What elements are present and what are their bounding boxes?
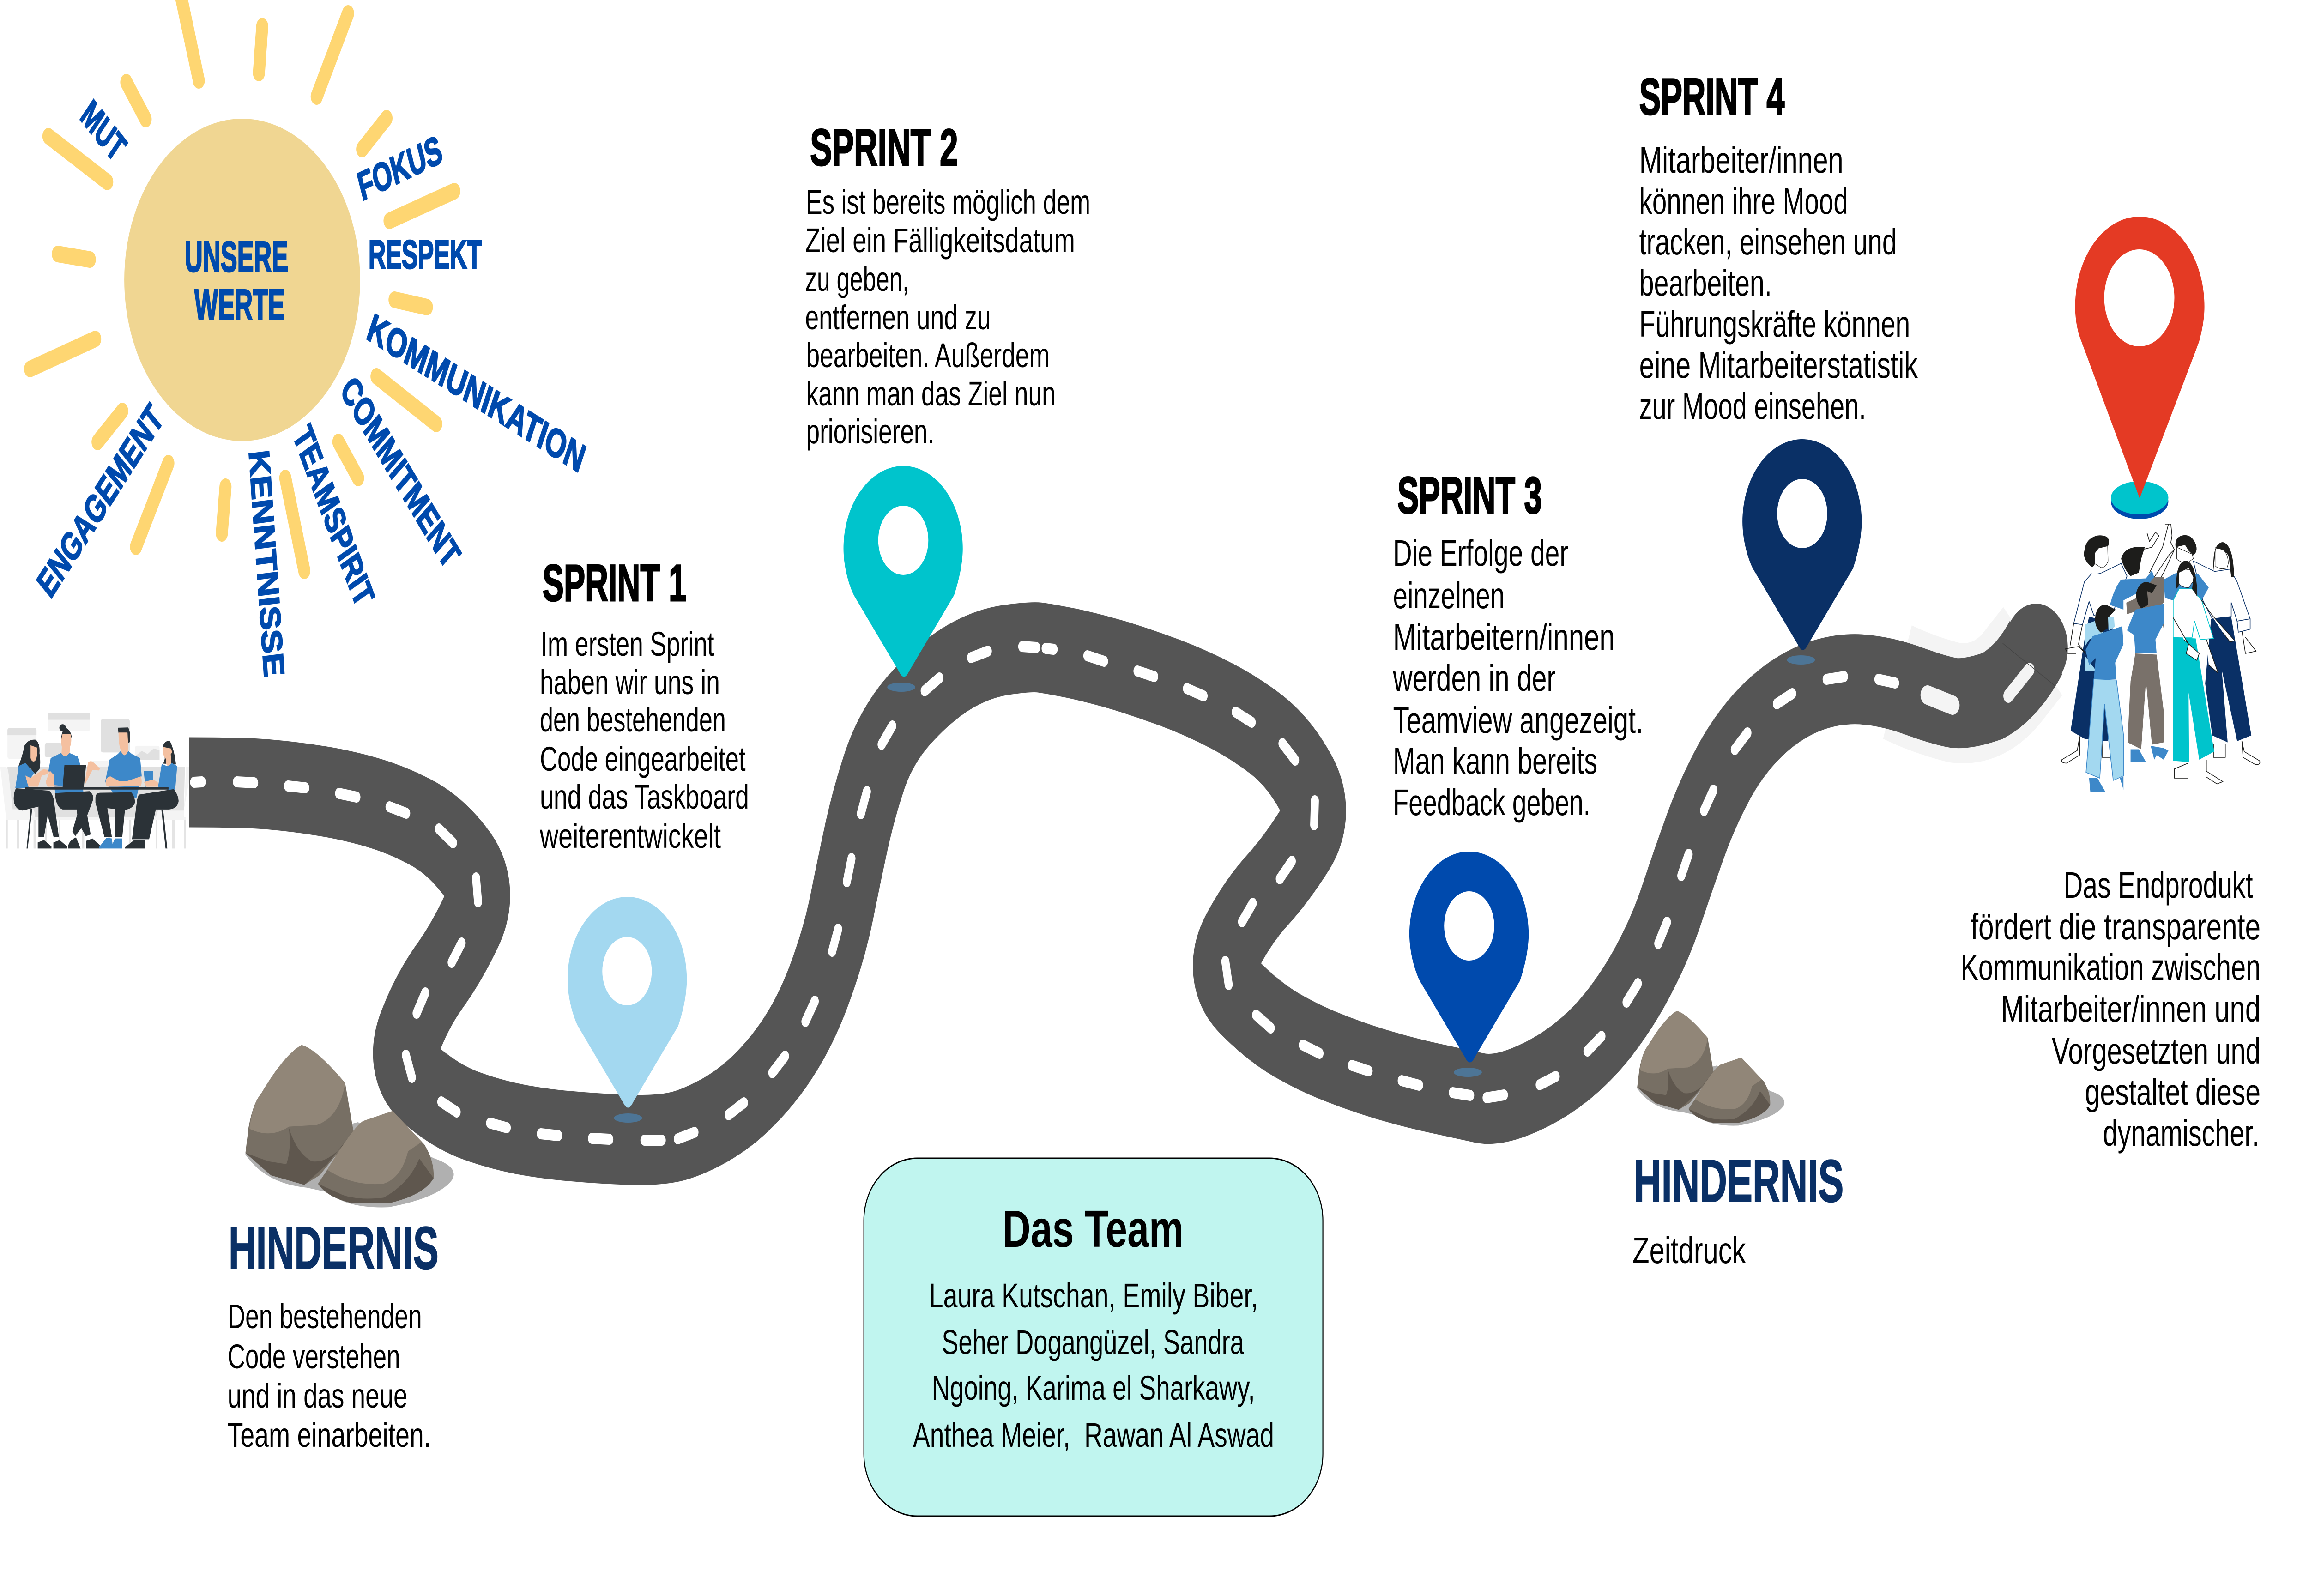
sprint 1 text: den bestehenden: [540, 701, 726, 739]
sprint 2 heading: SPRINT 2: [810, 119, 958, 176]
obstacle 2 heading: HINDERNIS: [1634, 1148, 1844, 1215]
end product text: Das Endprodukt: [2064, 864, 2253, 906]
back right person: [2194, 542, 2260, 765]
road end cap: [2004, 604, 2068, 691]
road end shoulder: [1898, 651, 2033, 703]
illustration: team at table: [0, 713, 192, 848]
lane dashes: [194, 647, 1895, 1140]
sprint 3 text: Die Erfolge der: [1393, 532, 1568, 574]
sprint 4 text: Führungskräfte können: [1639, 303, 1910, 345]
sun title: WERTE: [194, 281, 284, 329]
person 4: [125, 741, 179, 848]
sun disc: [124, 119, 360, 441]
obstacle 1 heading: HINDERNIS: [229, 1215, 439, 1282]
obstacle 1 text: [228, 1298, 431, 1454]
sprint 4 text: zur Mood einsehen.: [1639, 386, 1866, 427]
goal pin with disc: [2075, 217, 2205, 519]
person 2: [46, 724, 102, 848]
team names: Laura Kutschan, Emily Biber,: [929, 1277, 1258, 1315]
person 1: [14, 740, 67, 848]
sprint 4 text: Mitarbeiter/innen: [1639, 139, 1844, 181]
person 3: [96, 727, 142, 848]
rocks: second obstacle: [1637, 1011, 1784, 1126]
team names: Seher Dogangüzel, Sandra: [942, 1324, 1244, 1361]
sprint 4 text: bearbeiten.: [1639, 262, 1772, 303]
road: [189, 604, 2068, 1140]
sprint 3 text: [1393, 532, 1643, 823]
sprint 4 text: tracken, einsehen und: [1639, 221, 1897, 262]
end product text: [1961, 864, 2261, 1154]
sprint 3 text: werden in der: [1393, 658, 1556, 699]
team names: Anthea Meier, Rawan Al Aswad: [913, 1416, 1274, 1454]
end product text: fördert die transparente: [1971, 906, 2261, 947]
sprint 1 heading: SPRINT 1: [543, 554, 687, 612]
asphalt: [189, 647, 2036, 1140]
end product text: Kommunikation zwischen: [1961, 947, 2261, 988]
sprint 3 text: Man kann bereits: [1393, 740, 1597, 781]
value: Fokus: FOKUS: [354, 127, 446, 209]
sun rays: [30, 0, 454, 571]
sprint 2 text: [805, 183, 1090, 451]
obstacle 1 text: Den bestehenden: [228, 1298, 422, 1336]
sprint 4 text: [1639, 139, 1918, 427]
obstacle 1 text: Team einarbeiten.: [228, 1416, 431, 1454]
end product text: Mitarbeiter/innen und: [2001, 988, 2261, 1029]
sprint 1 text: Code eingearbeitet: [540, 740, 746, 778]
pin: sprint 3: [1409, 852, 1529, 1077]
sprint 4 text: können ihre Mood: [1639, 181, 1848, 222]
sprint 2 text: zu geben,: [805, 260, 909, 298]
sprint 2 text: priorisieren.: [806, 413, 934, 451]
team names: [913, 1277, 1274, 1454]
end product text: Vorgesetzten und: [2052, 1030, 2261, 1071]
blue shirt person with raised hand: [2110, 524, 2209, 610]
sprint 4 text: eine Mitarbeiterstatistik: [1639, 345, 1918, 386]
sprint 1 text: weiterentwickelt: [539, 817, 721, 855]
end product text: gestaltet diese: [2085, 1071, 2261, 1112]
curly haired person behind: [2142, 524, 2197, 581]
obstacle 1 text: Code verstehen: [228, 1338, 400, 1376]
panel: team: [864, 1158, 1323, 1516]
value: Commitment: COMMITMENT: [334, 368, 466, 577]
sprint 1 text: und das Taskboard: [540, 778, 749, 816]
obstacle 1 text: und in das neue: [228, 1377, 408, 1415]
sprint 2 text: bearbeiten. Außerdem: [806, 337, 1050, 375]
value: Mut: MUT: [74, 92, 132, 170]
sprint 1 text: Im ersten Sprint: [541, 625, 714, 663]
sprint 2 text: Es ist bereits möglich dem: [806, 183, 1090, 221]
sprint 2 text: entfernen und zu: [805, 299, 991, 337]
team heading: Das Team: [1003, 1200, 1184, 1258]
sprint 3 text: Mitarbeitern/innen: [1393, 617, 1615, 658]
back left person: [2061, 535, 2127, 763]
value: Kommunikation: KOMMUNIKATION: [363, 305, 590, 481]
value: Teamspirit: TEAMSPIRIT: [286, 418, 381, 614]
value: Kenntnisse: KENNTNISSE: [242, 448, 290, 679]
pin: sprint 1: [568, 897, 687, 1123]
sun with values: [30, 0, 590, 679]
sprint 2 text: kann man das Ziel nun: [806, 375, 1056, 413]
sprint 1 text: haben wir uns in: [540, 664, 720, 701]
obstacle 2 text: Zeitdruck: [1632, 1230, 1746, 1271]
pin: sprint 4: [1742, 439, 1862, 665]
sun title: UNSERE: [185, 233, 288, 281]
rocks: first obstacle: [245, 1045, 454, 1207]
sprint 2 text: Ziel ein Fälligkeitsdatum: [805, 222, 1075, 260]
teal trousers person: [2173, 561, 2235, 784]
sprint 3 text: einzelnen: [1393, 575, 1505, 616]
value: Engagement: ENGAGEMENT: [31, 396, 170, 606]
illustration: celebrating team: [2061, 524, 2260, 792]
sprint 1 text: [539, 625, 749, 855]
sprint 4 heading: SPRINT 4: [1639, 68, 1784, 126]
brown trousers person: [2126, 577, 2169, 762]
team names: Ngoing, Karima el Sharkawy,: [932, 1369, 1255, 1407]
sun title: [185, 233, 288, 329]
value: Respekt: RESPEKT: [369, 232, 482, 277]
end product text: dynamischer.: [2103, 1112, 2259, 1154]
light blue trousers person: [2085, 605, 2123, 792]
sprint 3 text: Feedback geben.: [1393, 782, 1590, 823]
pin: sprint 2: [844, 466, 963, 692]
sprint 3 heading: SPRINT 3: [1397, 466, 1542, 524]
sprint 3 text: Teamview angezeigt.: [1393, 700, 1643, 741]
final lane dashes: [1928, 695, 1952, 705]
